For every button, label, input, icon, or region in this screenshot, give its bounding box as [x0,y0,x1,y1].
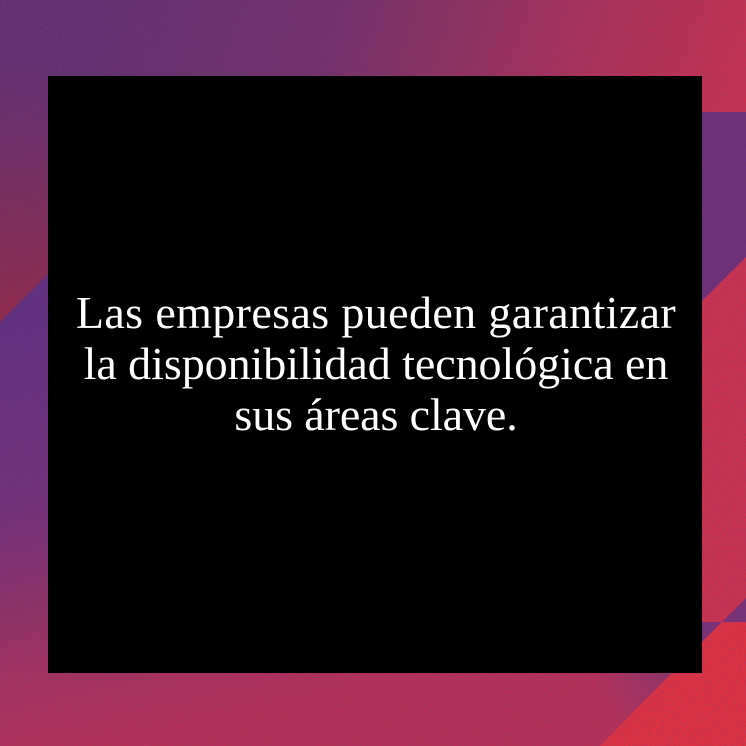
right red field [702,112,746,642]
text block: main message: sus áreas clave. [234,389,518,440]
panel: black message box [48,76,702,673]
small purple triangles [702,598,746,642]
text block: main message: la disponibilidad tecnológica en [84,338,668,389]
right purple shape [702,112,746,301]
text block: main message [76,287,676,440]
lower background field [0,274,746,746]
text block: main message: Las empresas pueden garantizar [76,287,676,338]
bottom-right red triangle [600,622,746,746]
